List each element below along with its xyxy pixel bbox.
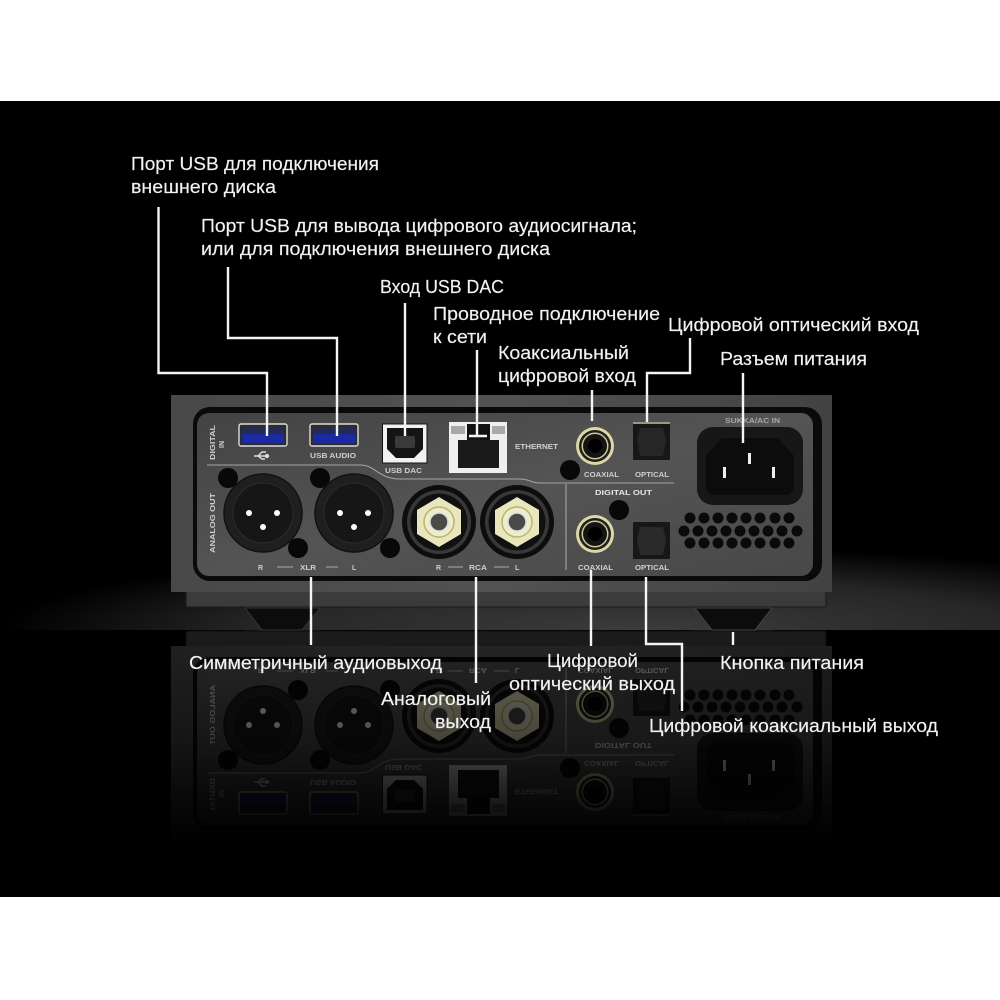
- divider lines: [207, 465, 674, 570]
- XLR connector left: [315, 474, 393, 552]
- leader line: external disk USB: [158, 207, 267, 436]
- text: wired network: к сети: [433, 326, 487, 347]
- leader line: Ethernet: [469, 350, 487, 436]
- leader line: power button: [732, 632, 734, 645]
- label: Ethernet: ETHERNET: [515, 444, 559, 451]
- text: analog output: Аналоговый: [381, 688, 491, 709]
- label: digital in: DIGITAL: [210, 424, 217, 460]
- floor glow behind device: [0, 540, 1000, 630]
- text: USB audio output: Порт USB для вывода цифрового аудиосигнала;: [201, 215, 637, 236]
- ventilation holes: [678, 512, 802, 548]
- XLR and RCA captions: [258, 565, 520, 572]
- left foot: [245, 608, 320, 630]
- label: USB DAC: USB DAC: [385, 468, 422, 475]
- optical output: [633, 522, 670, 559]
- RCA connector left: [480, 485, 554, 559]
- lower lip of chassis: [186, 590, 826, 607]
- text: analog output: выход: [435, 711, 491, 732]
- black background band: [0, 101, 1000, 897]
- USB DAC port: [382, 424, 427, 463]
- text: optical output: Цифровой: [547, 650, 638, 671]
- text: optical input: Цифровой оптический вход: [668, 314, 919, 335]
- coaxial input: [576, 427, 614, 465]
- label: in: IN: [219, 441, 226, 448]
- AC power inlet: [697, 427, 803, 505]
- XLR and RCA captions: L: [352, 565, 357, 572]
- USB port 2: [310, 424, 358, 446]
- text: analog output: [381, 688, 491, 732]
- text: coaxial input: Коаксиальный: [498, 342, 629, 363]
- label: analog out: ANALOG OUT: [210, 492, 217, 553]
- recessed panel border: [193, 407, 822, 581]
- text: optical output: [509, 650, 675, 694]
- RCA connector right: [402, 485, 476, 559]
- text: coaxial input: цифровой вход: [498, 365, 636, 386]
- audio device rear panel: [171, 395, 832, 630]
- leader line: USB audio: [228, 267, 337, 436]
- text: USB audio output: или для подключения внешнего диска: [201, 238, 551, 259]
- leader line: coaxial-side optical out: [590, 570, 592, 646]
- label: USB audio: USB AUDIO: [310, 453, 357, 460]
- mounting screw holes: [218, 460, 629, 558]
- text: coaxial input: [498, 342, 636, 386]
- leader line: analog out: [475, 577, 477, 683]
- label: coaxial in: COAXIAL: [584, 472, 620, 479]
- label: optical out: OPTICAL: [635, 565, 670, 572]
- text: wired network: Проводное подключение: [433, 303, 660, 324]
- text: balanced audio output: Симметричный аудиовыход: [189, 652, 442, 673]
- text: USB external disk: [131, 153, 379, 197]
- optical input: [633, 422, 670, 460]
- text: USB external disk: Порт USB для подключения: [131, 153, 379, 174]
- recessed panel: [197, 413, 813, 576]
- label: optical in: OPTICAL: [635, 472, 670, 479]
- leader line: coaxial out: [646, 577, 682, 711]
- coaxial output: [576, 515, 614, 553]
- label: coaxial out: COAXIAL: [578, 565, 614, 572]
- text: power button: Кнопка питания: [720, 652, 864, 673]
- device reflection: [171, 630, 832, 820]
- leader line: balanced out: [310, 577, 312, 645]
- XLR and RCA captions: RCA: [469, 565, 487, 572]
- leader line: power connector: [742, 373, 744, 443]
- chassis face: [171, 395, 832, 592]
- text: USB audio output: [201, 215, 637, 259]
- label: digital out: DIGITAL OUT: [595, 490, 653, 497]
- text: USB DAC input: Вход USB DAC: [380, 276, 504, 297]
- label: AC in: SUKKA/AC IN: [725, 418, 780, 425]
- text: USB external disk: внешнего диска: [131, 176, 277, 197]
- right foot: [695, 608, 772, 630]
- text: coaxial output: Цифровой коаксиальный выход: [649, 715, 938, 736]
- icon: USB symbol: [254, 452, 268, 459]
- XLR connector right: [224, 474, 302, 552]
- XLR and RCA captions: XLR: [300, 565, 316, 572]
- XLR and RCA captions: R: [258, 565, 263, 572]
- Ethernet port: [449, 422, 507, 473]
- text: power connector: Разъем питания: [720, 348, 867, 369]
- leader line: optical in: [647, 338, 690, 422]
- XLR and RCA captions: R: [436, 565, 441, 572]
- leader line: USB DAC: [404, 303, 406, 436]
- USB port 1: [239, 424, 287, 446]
- leader line: coaxial in: [591, 390, 593, 421]
- text: optical output: оптический выход: [509, 673, 675, 694]
- XLR and RCA captions: L: [515, 565, 520, 572]
- text: wired network: [433, 303, 660, 347]
